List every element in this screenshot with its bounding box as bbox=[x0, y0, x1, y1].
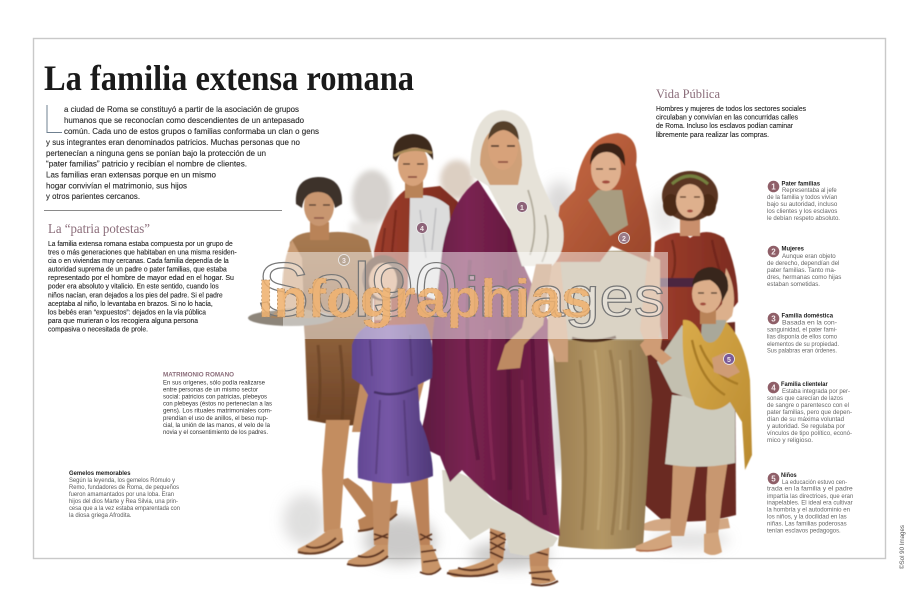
text block: Vida Pública: libremente para realizar las compras. bbox=[656, 130, 769, 139]
legend 4: Familia clientelar: 4 bbox=[771, 384, 776, 392]
figure: young man with red cloak bbox=[374, 134, 458, 340]
legend 4: Familia clientelar: vínculos de tipo político, econó- bbox=[767, 430, 852, 437]
legend 5: Niños: trada en la familia y el padre bbox=[767, 486, 853, 493]
legend 5: Niños: La educación estuvo cen- bbox=[782, 479, 847, 486]
text block: Gemelos memorables: Gemelos memorables bbox=[69, 470, 131, 477]
text block: patria potestas: cia o en viviendas muy cercanas. Cada familia dependía de la bbox=[48, 256, 229, 265]
legend 1: Pater familias: Pater familias bbox=[782, 180, 820, 188]
legend 2: Mujeres: de derecho, dependían del bbox=[767, 260, 839, 267]
legend 5: Niños: Niños bbox=[781, 472, 797, 479]
ghost figures behind bbox=[350, 160, 474, 252]
legend 2: Mujeres: Mujeres bbox=[782, 246, 804, 252]
text block: Matrimonio romano: En sus orígenes, sólo podía realizarse bbox=[163, 379, 265, 386]
illustration: Roman family group bbox=[248, 110, 752, 585]
legend 4: Familia clientelar: sonas que carecían de lazos bbox=[767, 395, 843, 402]
watermark band bbox=[257, 248, 668, 339]
badge: number 5 on boy bbox=[724, 354, 734, 364]
legend 1: Pater familias: de la familia y todos vivían bbox=[767, 194, 838, 201]
figure: servant with tray bbox=[248, 177, 398, 554]
intro drop cap L bbox=[47, 105, 62, 132]
intro text: “pater familias” patricio y recibían el nombre de clientes. bbox=[46, 158, 247, 168]
text block: Matrimonio romano: gens). Los rituales matrimoniales com- bbox=[163, 408, 272, 415]
text block: Matrimonio romano: social: patricios con patricias, plebeyos bbox=[163, 394, 268, 400]
legend 2: Mujeres: Aunque eran objeto bbox=[782, 253, 836, 260]
legend 2: Mujeres: pater familias. Tanto ma- bbox=[767, 267, 836, 274]
text block: patria potestas: poder era absoluto y vitalicio. En este sentido, cuando los bbox=[48, 282, 219, 291]
legend 3: Familia doméstica: sanguinidad, el pater fami- bbox=[767, 326, 837, 334]
text block: patria potestas bbox=[48, 239, 237, 334]
text block: patria potestas: aceptaba al niño, lo levantaba en brazos. Si no lo hacía, bbox=[48, 299, 213, 308]
watermark text outline: Sol90 bbox=[257, 248, 458, 333]
badge: number 3 on servant: 3 bbox=[342, 258, 346, 265]
legend 5: Niños: inapelables. El ideal era cultivar bbox=[767, 500, 853, 507]
legend 3: Familia doméstica bbox=[767, 312, 839, 354]
badge: number 1 on pater familias bbox=[516, 202, 528, 212]
text block: patria potestas: La familia extensa romana estaba compuesta por un grupo de bbox=[48, 239, 233, 248]
legend 5: Niños: niñas. Las familias poderosas bbox=[767, 520, 847, 528]
badge: number 4 on young man bbox=[416, 222, 428, 234]
badge: number 3 on servant bbox=[338, 254, 350, 266]
legend 1: Pater familias: 1 bbox=[771, 182, 776, 192]
text block: Matrimonio romano: novia y el consentimiento de los padres. bbox=[163, 429, 268, 436]
legend 2: Mujeres bbox=[767, 246, 841, 288]
intro text: a ciudad de Roma se constituyó a partir de la asociación de grupos bbox=[64, 104, 299, 114]
text block: Matrimonio romano: entre personas de un mismo sector bbox=[163, 386, 259, 393]
badge: number 4 on young man: 4 bbox=[420, 226, 424, 233]
credit: ©Sol 90 Images bbox=[899, 525, 906, 569]
legend 5: Niños: la hombría y el autodominio en bbox=[767, 507, 851, 514]
intro text: pertenecían a ninguna gens se ponían bajo la protección de un bbox=[46, 148, 266, 158]
intro text: común. Cada uno de estos grupos o familias conformaba un clan o gens bbox=[64, 126, 319, 136]
text block: Gemelos memorables: la diosa griega Afrodita. bbox=[69, 512, 132, 519]
text block: Gemelos memorables: Remo, fundadores de Roma, de pequeños bbox=[69, 484, 179, 491]
text block: Matrimonio romano: MATRIMONIO ROMANO bbox=[163, 372, 234, 378]
badge: number 1 on pater familias: 1 bbox=[520, 205, 524, 212]
legend 4: Familia clientelar: dían de su máxima voluntad bbox=[767, 416, 845, 423]
figure: woman at right bbox=[643, 171, 738, 531]
figure: boy in purple tunic bbox=[347, 255, 441, 574]
legend 1: Pater familias: los clientes y los esclavos bbox=[767, 208, 837, 215]
legend 4: Familia clientelar: mico y religioso. bbox=[767, 437, 813, 444]
badge: number 2 on woman: 2 bbox=[622, 236, 626, 243]
floor and background shadows bbox=[283, 181, 730, 569]
text block: patria potestas: los bebés eran “expuestos”: dejados en la vía pública bbox=[48, 307, 207, 316]
text block: patria potestas: para que murieran o los recogiera alguna persona bbox=[48, 316, 199, 325]
intro text: Las familias eran extensas porque en un mismo bbox=[46, 170, 216, 180]
text block: Matrimonio romano: prendían el uso de anillos, el beso nup- bbox=[163, 415, 268, 422]
text block: Vida Pública bbox=[656, 104, 806, 139]
text block: Gemelos memorables: Según la leyenda, los gemelos Rómulo y bbox=[69, 477, 176, 484]
legend 1: Pater familias: bajo su autoridad, incluso bbox=[767, 201, 838, 208]
badge: number 2 on woman bbox=[618, 232, 630, 244]
intro text bbox=[46, 104, 319, 201]
text block: patria potestas: tres o más generaciones que habitaban en una misma residen- bbox=[48, 248, 237, 256]
intro text: y otros parientes cercanos. bbox=[46, 191, 140, 201]
legend 4: Familia clientelar: Estaba integrada por per- bbox=[782, 388, 850, 395]
intro text: y sus integrantes eran denominados patricios. Muchas personas que no bbox=[46, 137, 300, 147]
text block: Vida Pública: circulaban y convivían en las concurridas calles bbox=[656, 112, 798, 122]
title: La familia extensa romana bbox=[44, 58, 414, 98]
legend 1: Pater familias bbox=[767, 180, 840, 222]
legend 3: Familia doméstica: 3 bbox=[771, 314, 776, 324]
legend 2: Mujeres: dres, hermanas como hijas bbox=[767, 274, 841, 281]
intro text: hogar convivían el matrimonio, sus hijos bbox=[46, 180, 187, 190]
figure: woman in orange hood bbox=[548, 133, 662, 549]
text block: Gemelos memorables: fueron amamantados por una loba. Eran bbox=[69, 491, 174, 498]
intro text: humanos que se reconocían como descendientes de un antepasado bbox=[64, 115, 304, 125]
legend 5: Niños: 5 bbox=[771, 474, 776, 484]
text block: Gemelos memorables: hijos del dios Marte y Rea Silvia, una prin- bbox=[69, 498, 178, 505]
text block: patria potestas: autoridad suprema de un padre o pater familias, que estaba bbox=[48, 265, 227, 274]
text block: Matrimonio romano: cial, la unión de las manos, el velo de la bbox=[163, 422, 270, 429]
text block: patria potestas: compasiva o necesitada de prole. bbox=[48, 324, 148, 334]
legend 3: Familia doméstica: Basada en la con- bbox=[782, 320, 837, 326]
legend 3: Familia doméstica: Familia doméstica bbox=[782, 312, 833, 320]
text block: Gemelos memorables bbox=[69, 470, 180, 519]
text block: Vida Pública: de Roma. Incluso los esclavos podían caminar bbox=[656, 121, 793, 130]
heading: Vida Pública: Vida Pública bbox=[656, 86, 720, 101]
text block: Matrimonio romano bbox=[163, 372, 273, 436]
legend 4: Familia clientelar: Familia clientelar bbox=[781, 381, 828, 388]
heading: La patria potestas: La “patria potestas” bbox=[48, 221, 150, 236]
legend 5: Niños: tenían esclavos pedagogos. bbox=[767, 528, 841, 535]
text block: Matrimonio romano: con plebeyas (éstos no pertenecían a las bbox=[163, 401, 273, 408]
legend 4: Familia clientelar: de sangre o parentesco con el bbox=[767, 402, 849, 409]
legend 4: Familia clientelar: y autoridad. Se regulaba por bbox=[767, 423, 845, 430]
watermark text outline: images bbox=[465, 265, 665, 328]
legend 1: Pater familias: le debían respeto absoluto. bbox=[767, 215, 840, 222]
legend 3: Familia doméstica: lias disponía de ellos como bbox=[767, 334, 838, 340]
legend 5: Niños bbox=[767, 472, 854, 535]
legend 2: Mujeres: 2 bbox=[771, 248, 776, 256]
text block: Gemelos memorables: cesa que a la vez estaba emparentada con bbox=[69, 505, 180, 512]
text block: Vida Pública: Hombres y mujeres de todos los sectores sociales bbox=[656, 104, 806, 113]
figure: boy with yellow cloak bbox=[636, 267, 752, 555]
text block: patria potestas: representado por el hombre de mayor edad en el hogar. Su bbox=[48, 273, 234, 282]
legend 5: Niños: impartía las directrices, que eran bbox=[767, 493, 854, 500]
legend 4: Familia clientelar: pater familias, pero que depen- bbox=[767, 409, 852, 416]
watermark text outline bbox=[257, 248, 665, 333]
legend 2: Mujeres: estaban sometidas. bbox=[767, 281, 820, 288]
legend 4: Familia clientelar bbox=[767, 381, 852, 444]
legend 3: Familia doméstica: Sus palabras eran órdenes. bbox=[767, 348, 837, 354]
legend 5: Niños: los niños, y la docilidad en las bbox=[767, 514, 847, 521]
figure: pater familias with purple toga bbox=[417, 110, 564, 585]
text block: patria potestas: niños nacían, eran dejados a los pies del padre. Si el padre bbox=[48, 290, 223, 299]
legend 3: Familia doméstica: elementos de su propiedad. bbox=[767, 341, 839, 348]
badge: number 5 on boy: 5 bbox=[727, 357, 731, 364]
legend 1: Pater familias: Representaba al jefe bbox=[782, 187, 837, 194]
watermark text orange: Infographias bbox=[258, 269, 592, 329]
